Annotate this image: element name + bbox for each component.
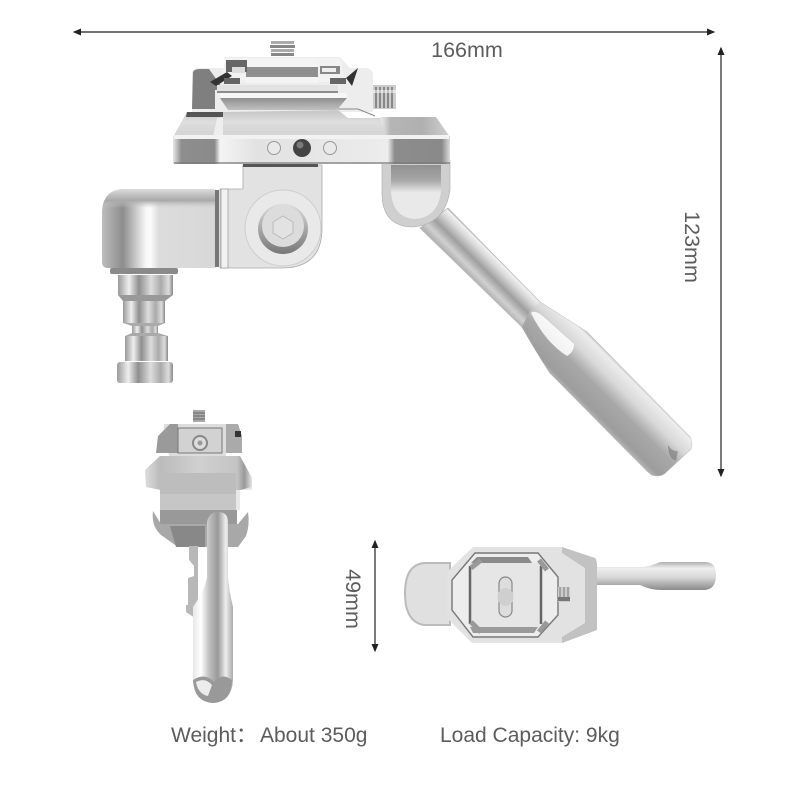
product front view: mount with handle [102,41,692,476]
spec: load capacity: Load Capacity: 9kg [440,724,620,747]
pivot bracket [220,164,322,268]
tripod screw [270,41,295,60]
tilt handle [420,208,692,476]
spec: weight: About 350g [260,724,367,747]
spec: weight: Weight： [171,724,257,747]
rear handle [193,512,233,703]
top view handle [597,562,716,590]
product rear view [145,410,252,703]
rear body [145,456,252,547]
rear knob [186,546,198,620]
height dimension arrow: 123mm: 123mm [680,211,704,283]
depth dimension arrow: 49mm: 49mm [341,569,365,629]
base plate [173,110,450,164]
rear clamp [156,424,242,458]
hex bolt [273,216,293,239]
quick release clamp top [192,57,375,116]
depth dimension arrow: 49mm [341,541,375,651]
rear screw [193,410,205,422]
plate holes and button [268,139,336,157]
side locking bolt [370,85,396,109]
product top view [405,547,716,643]
quick release knob [110,268,178,383]
top view body [447,547,597,643]
top view rounded end [405,563,450,625]
handle clevis [382,160,450,227]
swivel block [102,189,219,268]
width dimension arrow: 166mm: 166mm [431,38,503,62]
